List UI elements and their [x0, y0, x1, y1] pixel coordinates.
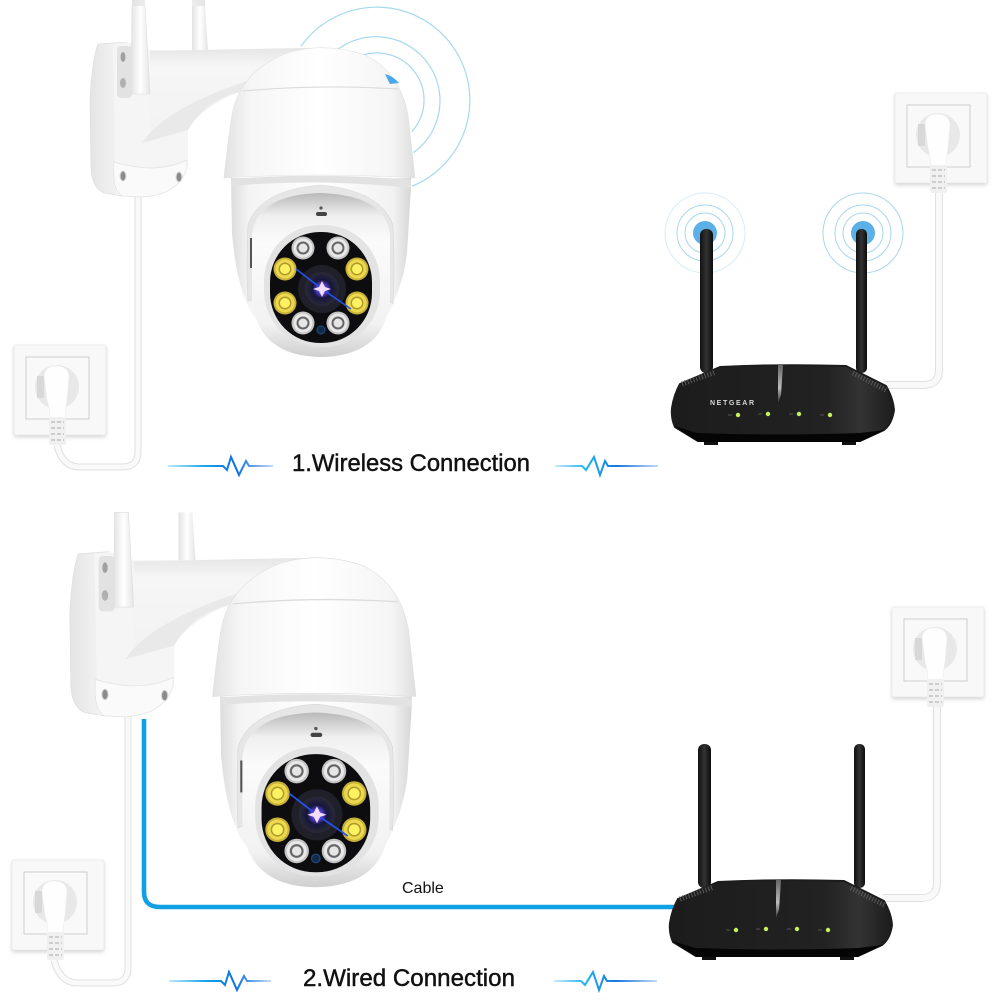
router: wired section	[670, 744, 892, 960]
wireless camera	[90, 0, 415, 357]
wall socket: wireless camera	[14, 345, 106, 445]
pulse icon: wireless left	[168, 457, 273, 475]
cable label: Cable	[402, 880, 444, 897]
blue signal wedge on dome	[385, 74, 399, 84]
heading: wireless connection: 1.Wireless Connection	[292, 450, 530, 477]
wired camera	[70, 512, 416, 887]
router: wireless section	[672, 229, 894, 445]
camera assembly	[90, 5, 415, 357]
antenna tips cut by top edge	[132, 0, 205, 6]
heading: wired connection: 2.Wired Connection	[303, 965, 515, 992]
pulse icon: wired left	[169, 972, 271, 990]
power cable: router to socket, wired section	[882, 700, 937, 898]
power cable: wired camera to wall socket	[54, 715, 128, 983]
wireless section: signal waves behind camera	[301, 7, 470, 186]
power cable: router to socket, wireless section	[884, 190, 939, 385]
wall socket: router, wireless section	[895, 93, 987, 193]
pulse icon: wireless right	[555, 457, 658, 475]
right antenna rings	[823, 193, 903, 273]
brand label: NETGEAR	[710, 400, 754, 407]
wall socket: wired camera	[12, 860, 104, 960]
pulse icon: wired right	[554, 972, 657, 990]
wall socket: router, wired section	[892, 607, 984, 707]
wifi rings on router antennas	[665, 193, 903, 273]
ethernet cable	[144, 719, 680, 907]
left antenna rings	[665, 193, 745, 273]
power cable: wireless camera to wall socket	[57, 195, 138, 467]
